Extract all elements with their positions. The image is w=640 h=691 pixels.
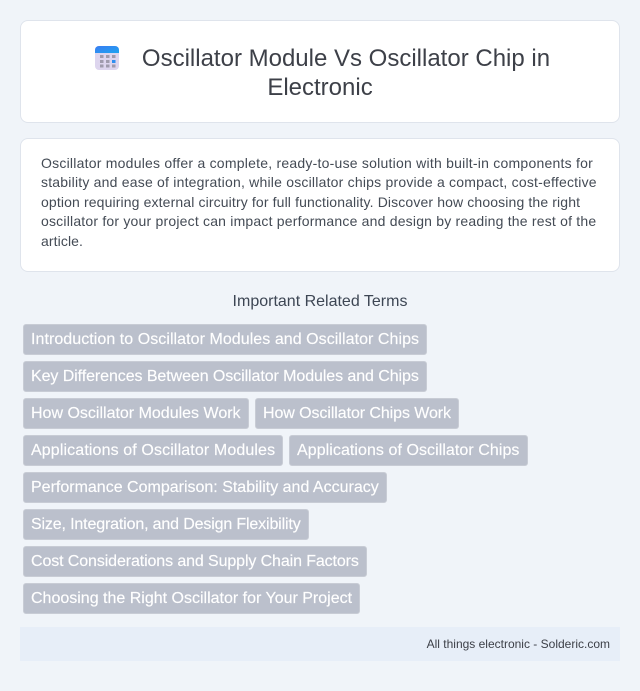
- tag: [23, 583, 360, 614]
- tag: [23, 324, 427, 355]
- intro paragraph: oscillator for your project can impact performance and design by reading the rest of the: [41, 213, 596, 229]
- tag: [289, 435, 528, 466]
- tag: [255, 398, 459, 429]
- title: [142, 45, 550, 101]
- footer bar: [20, 627, 620, 661]
- heading: important related terms: Important Related Terms: [233, 293, 407, 310]
- intro paragraph: stability and ease of integration, while oscillator chips provide a compact, cost-effective: [41, 174, 597, 190]
- tag: Key Differences Between Oscillator Modules and Chips: [31, 368, 419, 385]
- panel: intro text: [20, 138, 620, 272]
- tag: [23, 435, 283, 466]
- tag: Size, Integration, and Design Flexibility: [31, 516, 301, 533]
- tag: [23, 509, 309, 540]
- tag: Choosing the Right Oscillator for Your Project: [31, 590, 352, 607]
- tag: Applications of Oscillator Chips: [297, 442, 519, 459]
- tag: [23, 398, 249, 429]
- tag: How Oscillator Modules Work: [31, 405, 241, 422]
- tag list: [23, 324, 528, 614]
- intro paragraph: Oscillator modules offer a complete, ready-to-use solution with built-in components for: [41, 155, 593, 171]
- title: Oscillator Module Vs Oscillator Chip in: [142, 45, 550, 72]
- tag: How Oscillator Chips Work: [263, 405, 451, 422]
- tag: [23, 361, 427, 392]
- footer text: All things electronic - Solderic.com: [427, 637, 610, 651]
- icon: calendar: [95, 46, 119, 70]
- intro paragraph: [41, 155, 597, 249]
- tag: Applications of Oscillator Modules: [31, 442, 275, 459]
- intro paragraph: option requiring external circuitry for full functionality. Discover how choosing the right: [41, 194, 580, 210]
- tag: Cost Considerations and Supply Chain Factors: [31, 553, 359, 570]
- intro paragraph: article.: [41, 233, 83, 249]
- panel: title card: [20, 20, 620, 123]
- tag: Performance Comparison: Stability and Accuracy: [31, 479, 379, 496]
- tag: [23, 472, 387, 503]
- tag: Introduction to Oscillator Modules and Oscillator Chips: [31, 331, 419, 348]
- title: Electronic: [267, 74, 373, 101]
- tag: [23, 546, 367, 577]
